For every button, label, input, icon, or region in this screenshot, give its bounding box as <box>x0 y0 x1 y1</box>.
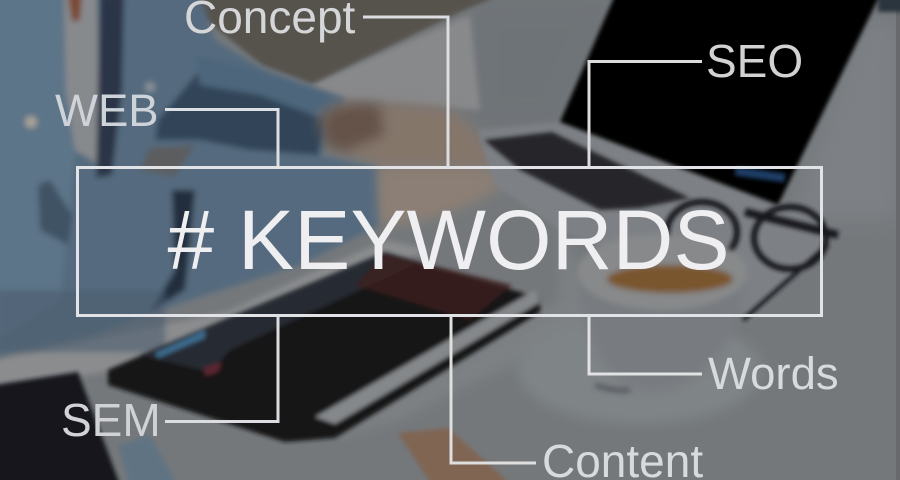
keyword: SEO <box>589 35 803 167</box>
keyword: WEB: WEB <box>55 85 159 136</box>
photo: coffee cup and saucer <box>518 280 762 424</box>
background: brown wall area <box>175 0 500 84</box>
keyword: WEB <box>55 85 278 167</box>
keyword: SEO: SEO <box>706 35 803 87</box>
laptop base <box>478 122 840 320</box>
keyword: Words <box>589 316 839 399</box>
photo: tablet <box>108 252 540 442</box>
photo: phone <box>0 372 120 480</box>
keyword: SEM: SEM <box>61 394 161 446</box>
keyword: Concept <box>184 0 448 167</box>
photo: hands <box>318 102 505 225</box>
photo: wooden object <box>398 428 512 480</box>
keyword: SEM <box>61 316 278 446</box>
photo: cup rim and coffee <box>577 234 747 390</box>
main heading: # KEYWORDS <box>168 193 730 287</box>
photo: blue paper <box>118 435 178 480</box>
photo: glasses <box>667 202 838 320</box>
laptop screen <box>560 0 880 205</box>
photo: laptop <box>478 0 880 320</box>
photo: person in denim shirt <box>0 0 380 357</box>
keyword: Content <box>451 316 703 480</box>
laptop keyboard <box>484 132 690 210</box>
keyword: Words: Words <box>708 348 839 399</box>
main keyword box <box>78 168 822 316</box>
background: dark corner <box>878 0 900 12</box>
